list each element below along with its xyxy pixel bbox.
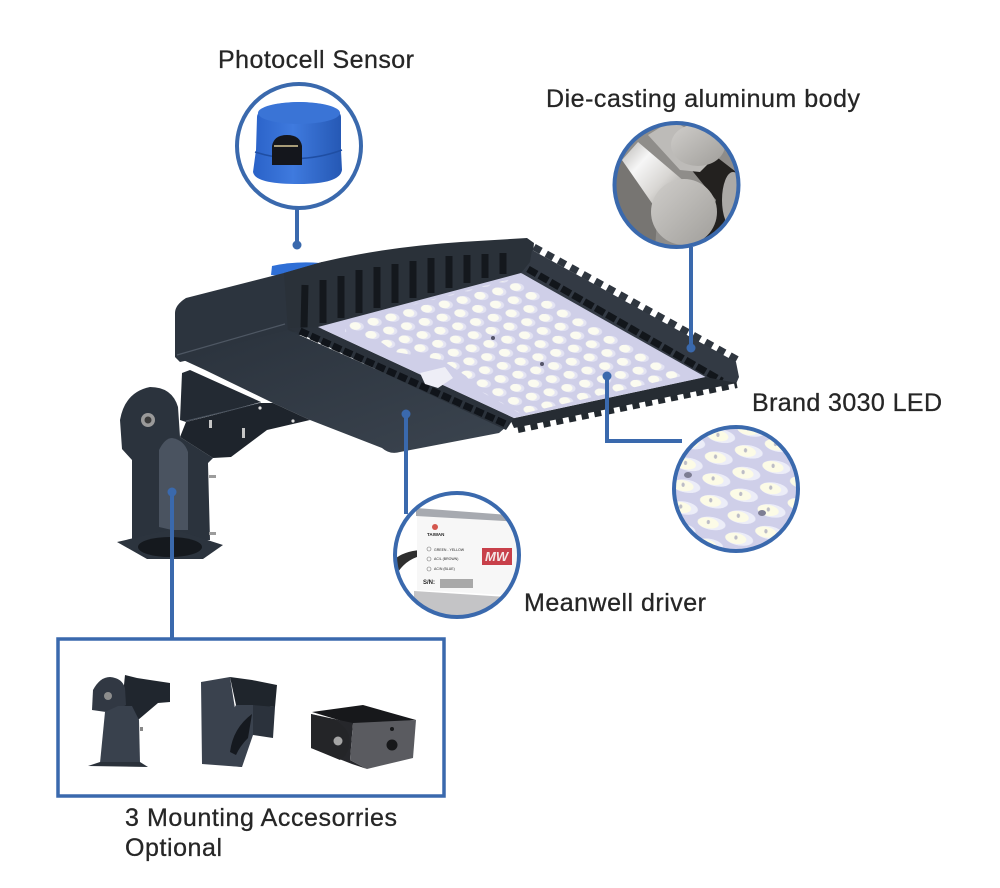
heat sink fins — [304, 253, 503, 328]
callout circle: Meanwell driver: AC/N (BLUE) — [434, 567, 455, 571]
heading: 3 Mounting Accessories Optional: Optional — [125, 834, 222, 862]
right bar end — [722, 172, 736, 220]
LED smudges — [491, 336, 544, 366]
product: shoebox area light — [117, 238, 739, 559]
callout circle: LED close-up — [674, 427, 798, 551]
right rim grid — [528, 269, 722, 381]
lens connector — [420, 367, 453, 388]
callout line: photocell — [292, 209, 302, 250]
callout circle: Meanwell driver: S/N: — [423, 580, 435, 586]
bracket upper — [180, 370, 261, 422]
heading: Brand 3030 LED: Brand 3030 LED — [752, 389, 942, 417]
arm front pillar — [159, 438, 188, 530]
callout circle: Meanwell driver: TAIWAN — [427, 532, 444, 537]
arm bolt — [141, 413, 155, 427]
callout line: aluminum body — [686, 247, 696, 352]
heading: 3 Mounting Accessories Optional — [125, 804, 397, 862]
mounting arm — [120, 387, 213, 540]
callout circle: Meanwell driver: MW — [485, 549, 510, 564]
bottom rim — [510, 377, 737, 428]
callout circle: Meanwell driver: GREEN - YELLOW — [434, 548, 465, 552]
accessory: curved arm — [201, 677, 277, 767]
LED panel — [318, 273, 706, 418]
icon: blue sensor on top of housing — [271, 262, 320, 278]
bracket lower — [180, 403, 310, 458]
driver box — [179, 330, 506, 453]
accessory: slip fitter arm — [88, 675, 170, 767]
callout line: LED — [602, 372, 682, 441]
panel: mounting accessories — [58, 639, 444, 796]
main bar end — [651, 179, 717, 245]
housing ridge highlight — [177, 324, 285, 355]
main bar lower side — [616, 160, 656, 241]
callout circle: aluminum bars — [612, 120, 744, 250]
LED array — [345, 278, 682, 414]
callout line: driver — [402, 410, 410, 514]
heading: Photocell Sensor: Photocell Sensor — [218, 46, 414, 74]
heading: 3 Mounting Accessories Optional: 3 Mounting Accesorries — [125, 804, 397, 832]
right rim comb teeth — [534, 247, 738, 360]
heading: Meanwell driver: Meanwell driver — [524, 589, 706, 617]
right rim — [521, 250, 739, 384]
housing rear body — [175, 262, 322, 362]
accessory: square adapter box — [311, 705, 416, 769]
upper bar — [648, 125, 708, 172]
left rim grid — [288, 327, 514, 430]
callout line: mounting — [168, 488, 176, 640]
arm side pins — [209, 475, 216, 478]
bottom rim comb teeth — [518, 385, 737, 430]
dark gaps — [692, 158, 736, 238]
callout circle: photocell sensor — [237, 84, 361, 208]
arm base plate — [117, 529, 223, 559]
fin block — [284, 238, 534, 332]
main bar highlight — [622, 142, 682, 204]
callout circle: Meanwell driver: AC/L (BROWN) — [434, 557, 458, 561]
callout circle: Meanwell driver — [392, 493, 522, 620]
heading: Die-casting aluminum body: Die-casting aluminum body — [546, 85, 860, 113]
